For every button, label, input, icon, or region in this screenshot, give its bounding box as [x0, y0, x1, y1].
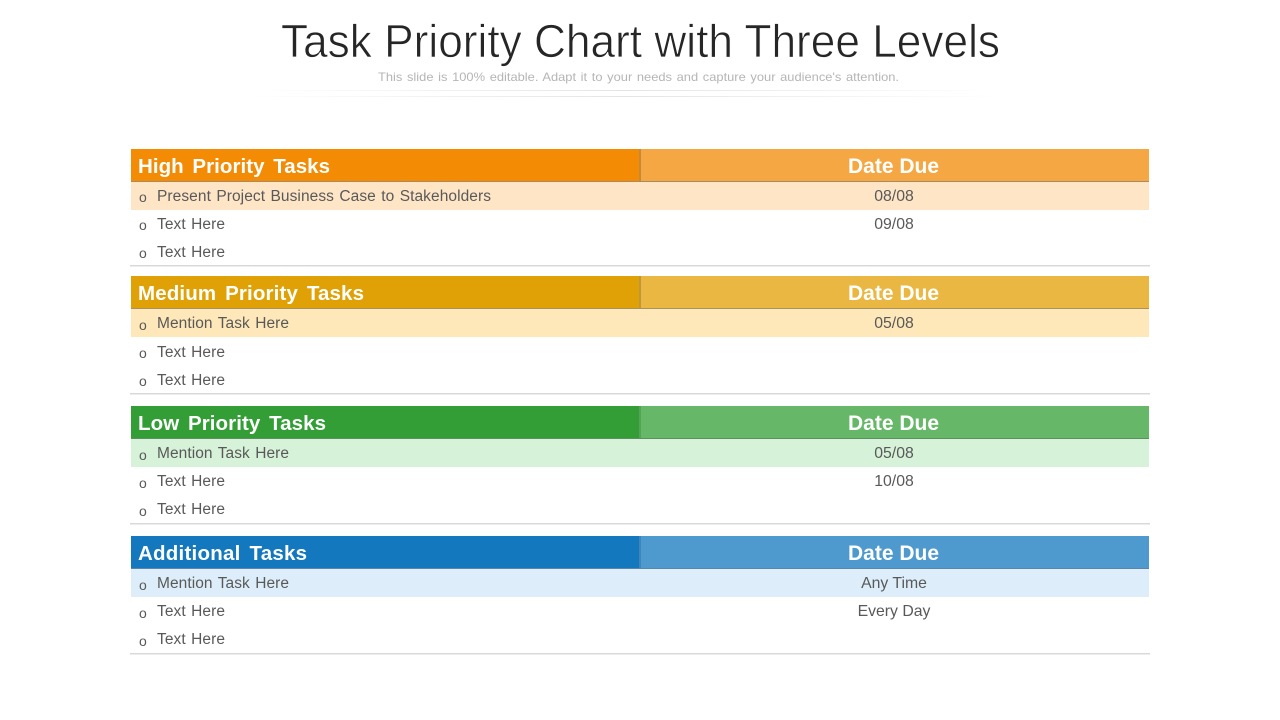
additional tasks header: Additional Tasks	[138, 542, 307, 565]
medium priority rows: o	[139, 345, 147, 361]
additional tasks rows: o	[139, 605, 147, 621]
additional tasks header: Date Due	[848, 542, 939, 565]
medium priority rows	[130, 309, 1150, 394]
low priority rows	[130, 439, 1150, 524]
title: Task Priority Chart with Three Levels	[281, 15, 1000, 67]
additional tasks rows: Every Day	[858, 603, 931, 620]
low priority rows: 10/08	[874, 473, 914, 490]
low priority rows: Mention Task Here	[157, 445, 289, 462]
additional tasks rows: Mention Task Here	[157, 575, 289, 592]
high priority header: High Priority Tasks	[138, 155, 330, 178]
low priority rows: o	[139, 447, 147, 463]
high priority rows: 08/08	[874, 188, 914, 205]
additional tasks rows: Any Time	[861, 575, 927, 592]
medium priority rows: Text Here	[157, 344, 225, 361]
low priority rows: Text Here	[157, 473, 225, 490]
medium priority rows: 05/08	[874, 315, 914, 332]
additional tasks header	[131, 536, 1149, 569]
high priority header	[131, 149, 1149, 182]
low priority rows: 05/08	[874, 445, 914, 462]
medium priority rows: o	[139, 317, 147, 333]
medium priority header: Date Due	[848, 282, 939, 305]
medium priority rows: Text Here	[157, 372, 225, 389]
high priority rows: o	[139, 245, 147, 261]
low priority header: Date Due	[848, 412, 939, 435]
high priority rows: Text Here	[157, 216, 225, 233]
high priority rows: Text Here	[157, 244, 225, 261]
high priority rows	[130, 182, 1150, 266]
panel: medium priority tasks	[130, 276, 1150, 394]
panel: high priority tasks	[130, 149, 1150, 266]
additional tasks rows: Text Here	[157, 603, 225, 620]
medium priority rows: o	[139, 373, 147, 389]
low priority rows: o	[139, 475, 147, 491]
low priority header	[131, 406, 1149, 439]
medium priority header: Medium Priority Tasks	[138, 282, 364, 305]
low priority rows: o	[139, 503, 147, 519]
additional tasks rows: o	[139, 633, 147, 649]
panel: low priority tasks	[130, 406, 1150, 524]
additional tasks rows: Text Here	[157, 631, 225, 648]
additional tasks rows: o	[139, 577, 147, 593]
medium priority header	[131, 276, 1149, 309]
low priority header: Low Priority Tasks	[138, 412, 326, 435]
additional tasks rows	[130, 569, 1150, 654]
high priority header: Date Due	[848, 155, 939, 178]
medium priority rows: Mention Task Here	[157, 315, 289, 332]
high priority rows: Present Project Business Case to Stakeholders	[157, 188, 491, 205]
subtitle: This slide is 100% editable. Adapt it to your needs and capture your audience's attention.	[378, 70, 899, 84]
high priority rows: o	[139, 189, 147, 205]
high priority rows: 09/08	[874, 216, 914, 233]
panel: additional tasks	[130, 536, 1150, 654]
low priority rows: Text Here	[157, 501, 225, 518]
high priority rows: o	[139, 217, 147, 233]
